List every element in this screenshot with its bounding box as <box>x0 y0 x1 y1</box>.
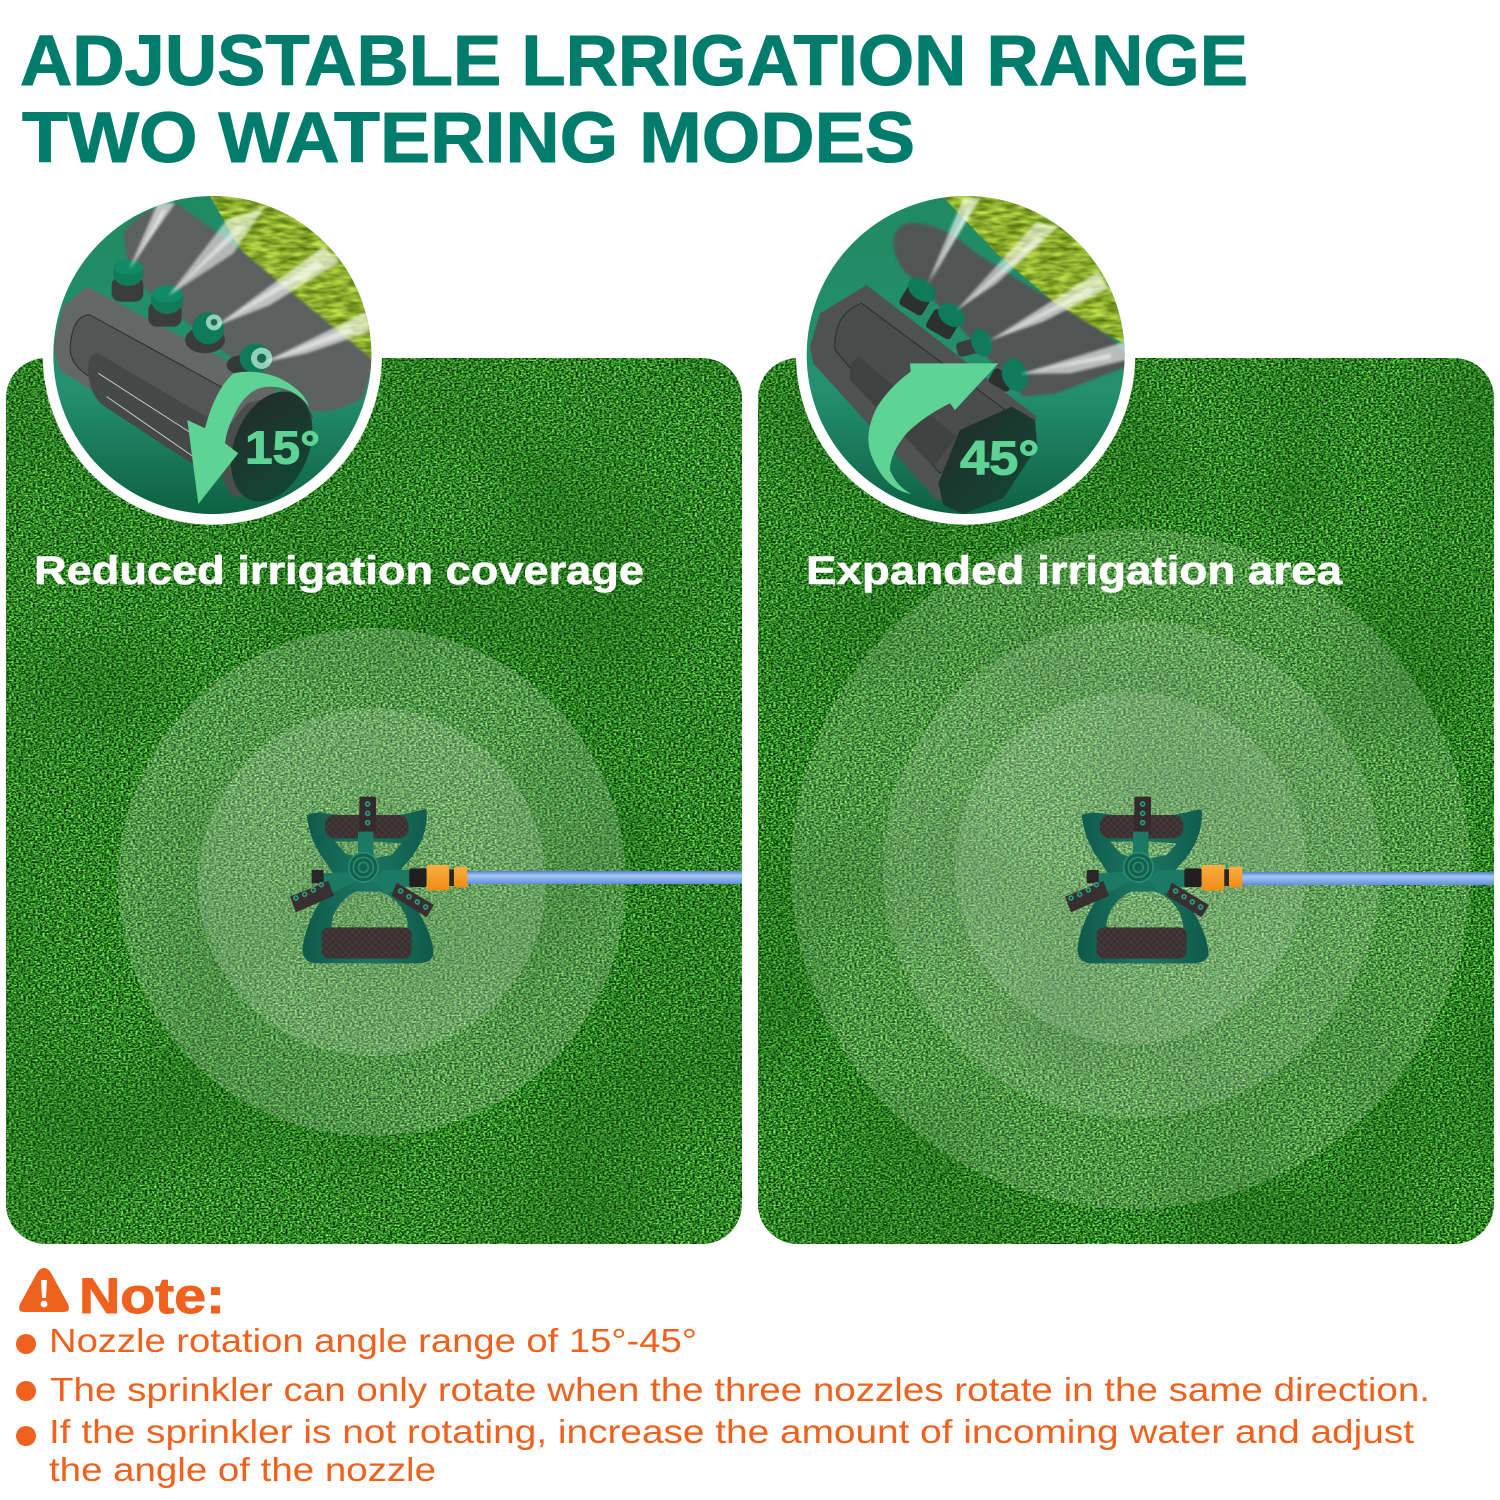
top arm <box>1133 797 1151 858</box>
bullet 2 <box>16 1381 36 1401</box>
water sprays <box>927 198 1127 374</box>
cylinder body <box>54 286 276 425</box>
top grip <box>325 815 408 838</box>
badge: 15 degree nozzle <box>43 185 382 525</box>
middle water ring <box>883 620 1381 1118</box>
nozzles <box>898 273 1033 395</box>
water sprays <box>129 202 370 363</box>
right arm <box>373 870 434 917</box>
title: ADJUSTABLE LRRIGATION RANGE <box>20 22 1248 101</box>
note line 4: the angle of the nozzle <box>49 1451 436 1488</box>
angle label: 15° <box>245 421 320 473</box>
note line 3: If the sprinkler is not rotating, increase the amount of incoming water and adjust <box>49 1413 1414 1450</box>
bottom grip <box>1097 927 1187 959</box>
left arm <box>290 870 355 912</box>
hub <box>1124 853 1153 882</box>
rotation arrow <box>868 363 998 494</box>
inner water ring <box>198 708 546 1056</box>
sprinkler frame <box>303 809 434 963</box>
top arm <box>358 797 376 858</box>
bullet 1 <box>16 1334 36 1354</box>
left arm <box>1065 870 1130 912</box>
bullet 3 <box>16 1426 36 1446</box>
end cap <box>938 407 1037 514</box>
rotation arrow <box>187 372 309 504</box>
hose connector <box>1184 865 1242 890</box>
note heading: Note: <box>79 1268 225 1324</box>
note line 1: Nozzle rotation angle range of 15°-45° <box>49 1322 697 1359</box>
inner water ring <box>955 692 1307 1044</box>
end cap <box>231 392 312 502</box>
panel: reduced coverage lawn <box>6 358 745 1244</box>
note line 2: The sprinkler can only rotate when the three nozzles rotate in the same direction. <box>50 1371 1430 1408</box>
sprinkler frame <box>1078 809 1209 963</box>
icon: warning triangle <box>19 1268 69 1312</box>
sprinkler: left <box>290 797 467 963</box>
cylinder body <box>810 285 1037 500</box>
garden hose <box>1240 872 1496 885</box>
bottom grip <box>322 927 412 959</box>
title: TWO WATERING MODES <box>22 99 915 178</box>
right arm <box>1148 870 1209 917</box>
hose connector <box>409 865 467 890</box>
sprinkler: right <box>1065 797 1242 963</box>
caption: expanded area: Expanded irrigation area <box>806 549 1343 593</box>
caption: reduced coverage: Reduced irrigation coverage <box>34 549 644 593</box>
top grip <box>1100 815 1183 838</box>
angle label: 45° <box>960 431 1039 485</box>
note list <box>16 1322 1430 1488</box>
badge: 45 degree nozzle <box>796 185 1135 525</box>
outer water ring <box>791 529 1471 1209</box>
panel: expanded area lawn <box>758 358 1496 1244</box>
nozzles <box>112 260 272 375</box>
outer water ring <box>118 628 626 1136</box>
title <box>20 22 1248 178</box>
garden hose <box>465 871 745 884</box>
hub <box>349 853 378 882</box>
